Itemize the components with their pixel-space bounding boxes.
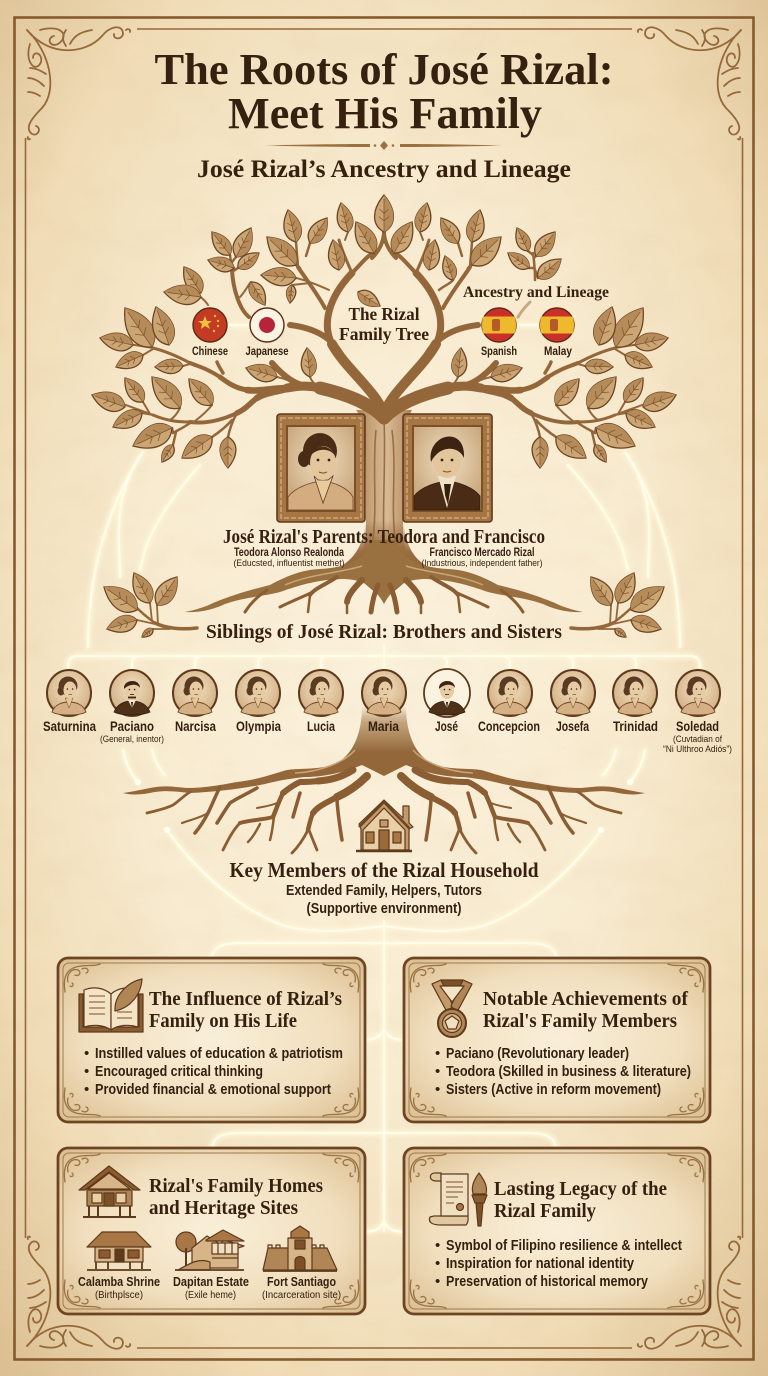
heading: Rizal Family [494,1201,596,1222]
parents heading: José Rizal's Parents: Teodora and Francisco [223,526,545,548]
sibling: Josefa: Josefa [556,719,589,734]
bullet list: Provided financial & emotional support [95,1081,331,1098]
bullet list: • [435,1045,440,1062]
bullet list: Inspiration for national identity [446,1255,635,1272]
sibling: Paciano: Paciano [110,719,154,734]
bullet list: Preservation of historical memory [446,1273,649,1290]
bullet list [84,1045,343,1098]
bullet list: • [84,1063,89,1080]
flag: Japanese: Japanese [246,344,289,358]
icon: house [356,800,413,851]
bullet list: Paciano (Revolutionary leader) [446,1045,629,1062]
tree title [339,304,429,344]
heading: and Heritage Sites [149,1198,298,1219]
trunk streaks [372,420,396,555]
sibling: Saturnina: Saturnina [43,719,96,734]
title ornament [265,141,503,150]
heading: The Influence of Rizal’s [149,989,342,1010]
bullet list [435,1237,682,1290]
sibling: Soledad [663,670,732,754]
mother caption: (Educsted, influentist methet) [234,558,344,569]
portrait frame: Francisco [403,414,492,522]
father caption: (Industrious, independent father) [422,558,542,569]
sibling: Maria [362,670,406,734]
father caption [422,547,542,569]
icon: stilt house [79,1166,140,1217]
heading: Family on His Life [149,1011,297,1032]
site: Calamba Shrine: (Birthplsce) [95,1289,143,1301]
flag: Chinese [192,308,228,358]
icon: medal [432,980,472,1037]
icon: scroll and torch [429,1173,487,1226]
heading: Lasting Legacy of the [494,1179,667,1200]
flag: Spanish [481,308,517,358]
top leaf [375,195,393,232]
sibling: Trinidad: Trinidad [613,719,658,734]
tree title: Family Tree [339,324,429,344]
sibling: Lucia [299,670,343,734]
subtitle: José Rizal’s Ancestry and Lineage [197,156,571,183]
sibling: Concepcion: Concepcion [478,719,540,734]
sibling: José: José [435,719,458,734]
inner heart leaf [354,286,384,312]
bullet list: Encouraged critical thinking [95,1063,263,1080]
family tree crown and trunk [89,195,679,565]
icon: open book and quill [79,979,143,1032]
bullet list: • [84,1045,89,1062]
household subtitle: (Supportive environment) [306,900,462,917]
sibling: Soledad: “Ni Ulthroo Adiós”) [663,744,732,754]
site: Calamba Shrine [78,1232,160,1301]
sibling: Narcisa [173,670,217,734]
bullet list: Teodora (Skilled in business & literature) [446,1063,691,1080]
panel: lasting legacy [404,1148,710,1314]
heading: Rizal's Family Members [483,1011,677,1032]
portrait frame: Teodora [277,414,365,522]
sibling: Trinidad [613,670,658,734]
sibling: José [424,669,470,734]
upper tree roots [185,520,583,613]
site: Fort Santiago [262,1226,341,1301]
trunk [352,410,416,565]
sibling: Saturnina [43,670,96,734]
site: Calamba Shrine: Calamba Shrine [78,1274,160,1289]
bullet list: Instilled values of education & patriotism [95,1045,343,1062]
father caption: Francisco Mercado Rizal [430,547,534,559]
lower roots [123,706,645,853]
sibling: Olympia: Olympia [236,719,281,734]
bullet list: Sisters (Active in reform movement) [446,1081,661,1098]
side leaves: right [571,569,670,640]
panel: influence of family [58,958,365,1122]
sibling: Olympia [236,670,281,734]
site: Fort Santiago: (Incarceration site) [262,1289,341,1301]
bullet list: • [435,1255,440,1272]
sibling: Soledad: Soledad [676,719,719,734]
sibling: Concepcion [478,670,540,734]
bullet list: • [435,1237,440,1254]
bullet list: • [435,1081,440,1098]
flag: Malay [540,308,574,358]
site: Dapitan Estate: (Exile heme) [185,1289,236,1301]
flag: Malay: Malay [544,344,572,358]
right branches and leaves [384,201,679,468]
left branches and leaves [89,201,384,468]
tree title: The Rizal [348,304,420,324]
site: Dapitan Estate: Dapitan Estate [173,1274,249,1289]
sibling: Paciano [100,670,164,744]
sibling: Maria: Maria [368,719,399,734]
sibling: Josefa [551,670,595,734]
household heading: Key Members of the Rizal Household [230,858,539,882]
flag: Chinese: Chinese [192,344,228,358]
sibling: Soledad: (Cuvtadian of [673,734,722,744]
glowing connector lines [68,325,700,1235]
heading: Notable Achievements of [483,989,688,1010]
flag: Spanish: Spanish [481,344,517,358]
side leaves: left [98,569,197,640]
panel: family homes and heritage sites [58,1148,365,1314]
flag: Japanese [246,308,289,358]
heading: Rizal's Family Homes [149,1176,323,1197]
upper right leaf cluster [439,225,566,317]
upper left leaf cluster [163,224,329,317]
sibling: Paciano: (General, inentor) [100,734,164,744]
mother caption: Teodora Alonso Realonda [234,547,344,559]
heading [483,989,688,1032]
panel: notable achievements [404,958,710,1122]
bullet list: • [435,1273,440,1290]
ancestry heading: Ancestry and Lineage [463,284,609,301]
heading [149,1176,323,1219]
household subtitle: Extended Family, Helpers, Tutors [286,882,482,899]
sibling: Narcisa: Narcisa [175,719,216,734]
title line 2: Meet His Family [228,89,542,138]
heading [494,1179,667,1222]
mother caption [234,547,344,569]
siblings heading: Siblings of José Rizal: Brothers and Sisters [206,621,562,643]
household subtitle [286,882,482,917]
bullet list [435,1045,691,1098]
site: Fort Santiago: Fort Santiago [267,1274,336,1289]
sibling: Lucia: Lucia [307,719,335,734]
heading [149,989,342,1032]
bullet list: • [84,1081,89,1098]
bullet list: • [435,1063,440,1080]
site: Dapitan Estate [173,1230,249,1301]
title: The Roots of José Rizal: [154,45,614,94]
bullet list: Symbol of Filipino resilience & intellect [446,1237,682,1254]
